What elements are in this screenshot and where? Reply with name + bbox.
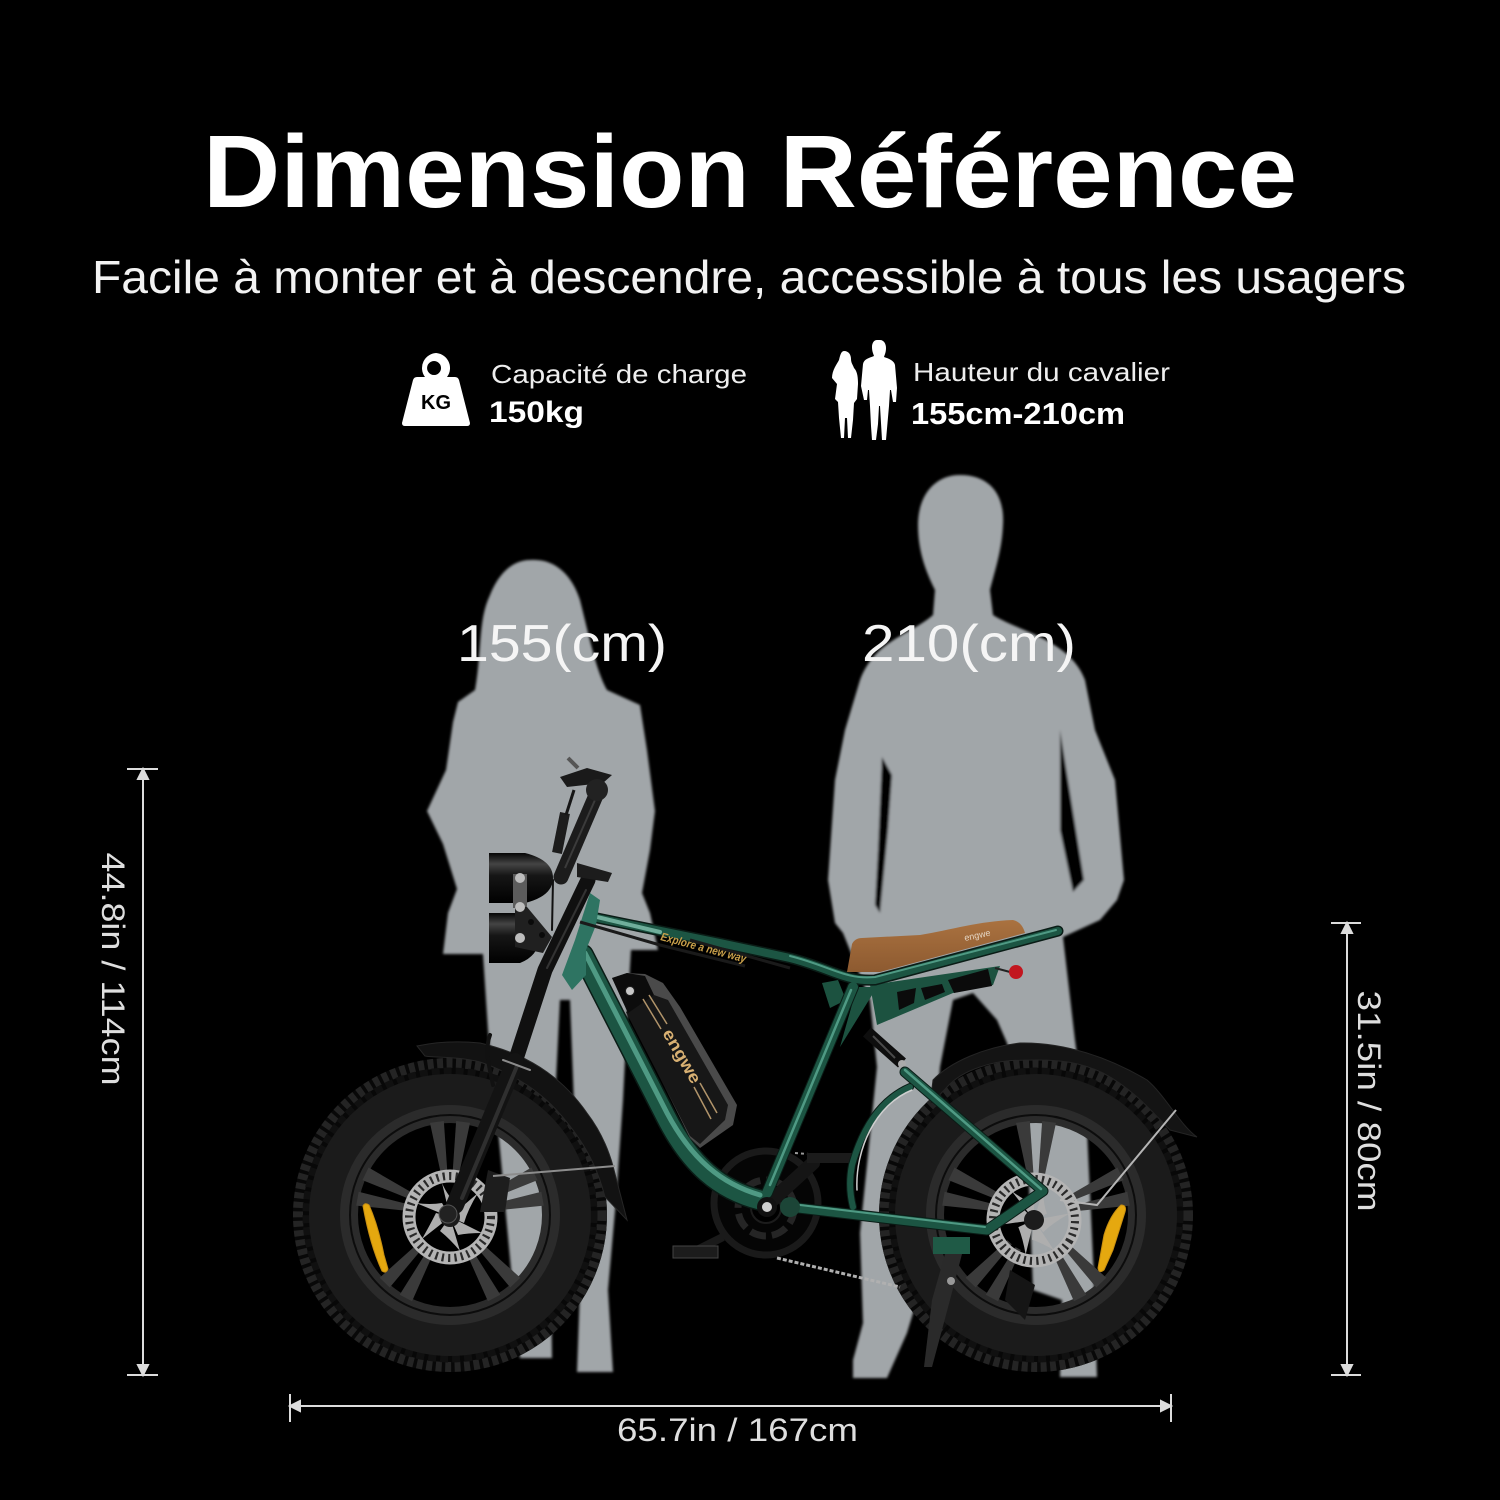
headlights <box>489 853 553 963</box>
height label: 210 cm: 210(cm) <box>862 615 1076 673</box>
dimension arrow: 31.5in height <box>1331 923 1361 1375</box>
icon: rider couple <box>832 340 897 440</box>
icon: weight: KG <box>421 392 451 414</box>
saddle <box>847 920 1025 972</box>
icon: weight <box>402 353 470 426</box>
frame <box>583 917 1058 1230</box>
icon: front reflector <box>363 1204 388 1272</box>
height label: 155 cm: 155(cm) <box>457 615 667 673</box>
tail light <box>995 965 1023 979</box>
dimension label: 65.7in / 167cm: 65.7in / 167cm <box>617 1412 858 1448</box>
chainring and crank <box>673 1151 900 1287</box>
fender stays <box>493 1110 1176 1205</box>
dimension arrow: 44.8in height <box>127 769 158 1375</box>
saddle: engwe <box>963 928 991 943</box>
silhouette: woman <box>427 560 658 1372</box>
load capacity text: Capacité de charge <box>491 359 747 389</box>
e-bike <box>298 758 1197 1367</box>
rider height text <box>911 357 1170 431</box>
front fender <box>417 1042 627 1220</box>
bottom bracket <box>757 1197 800 1217</box>
top tube cables <box>580 922 790 968</box>
kickstand <box>924 1237 970 1367</box>
top tube slogan: Explore a new way <box>659 931 748 966</box>
rear rack gusset <box>822 966 1000 1047</box>
rider height text: Hauteur du cavalier <box>913 357 1170 387</box>
rear fender <box>930 1043 1197 1137</box>
dimension arrow: 65.7in length <box>290 1394 1171 1422</box>
icon: rear reflector <box>1098 1205 1126 1272</box>
battery: engwe <box>659 1026 705 1087</box>
title: Dimension Référence <box>203 114 1297 229</box>
front wheel <box>298 1063 602 1367</box>
subtitle: Facile à monter et à descendre, accessible à tous les usagers <box>92 251 1406 303</box>
front fork <box>439 880 588 1223</box>
head tube joint <box>562 893 600 990</box>
frame highlights <box>585 917 1056 1227</box>
handlebar and display <box>557 758 612 882</box>
load capacity text <box>489 359 747 429</box>
load capacity text: 150kg <box>489 396 584 429</box>
frame outline <box>583 918 1058 1230</box>
rider height text: 155cm-210cm <box>911 396 1125 431</box>
rear wheel <box>884 1063 1188 1367</box>
frame base tubes <box>583 918 1058 1230</box>
dimension label: 31.5in / 80cm: 31.5in / 80cm <box>1351 990 1387 1212</box>
silhouette: man <box>828 475 1124 1378</box>
rear shock <box>867 1032 906 1068</box>
dimension label: 44.8in / 114cm: 44.8in / 114cm <box>95 852 131 1086</box>
battery <box>612 973 737 1148</box>
